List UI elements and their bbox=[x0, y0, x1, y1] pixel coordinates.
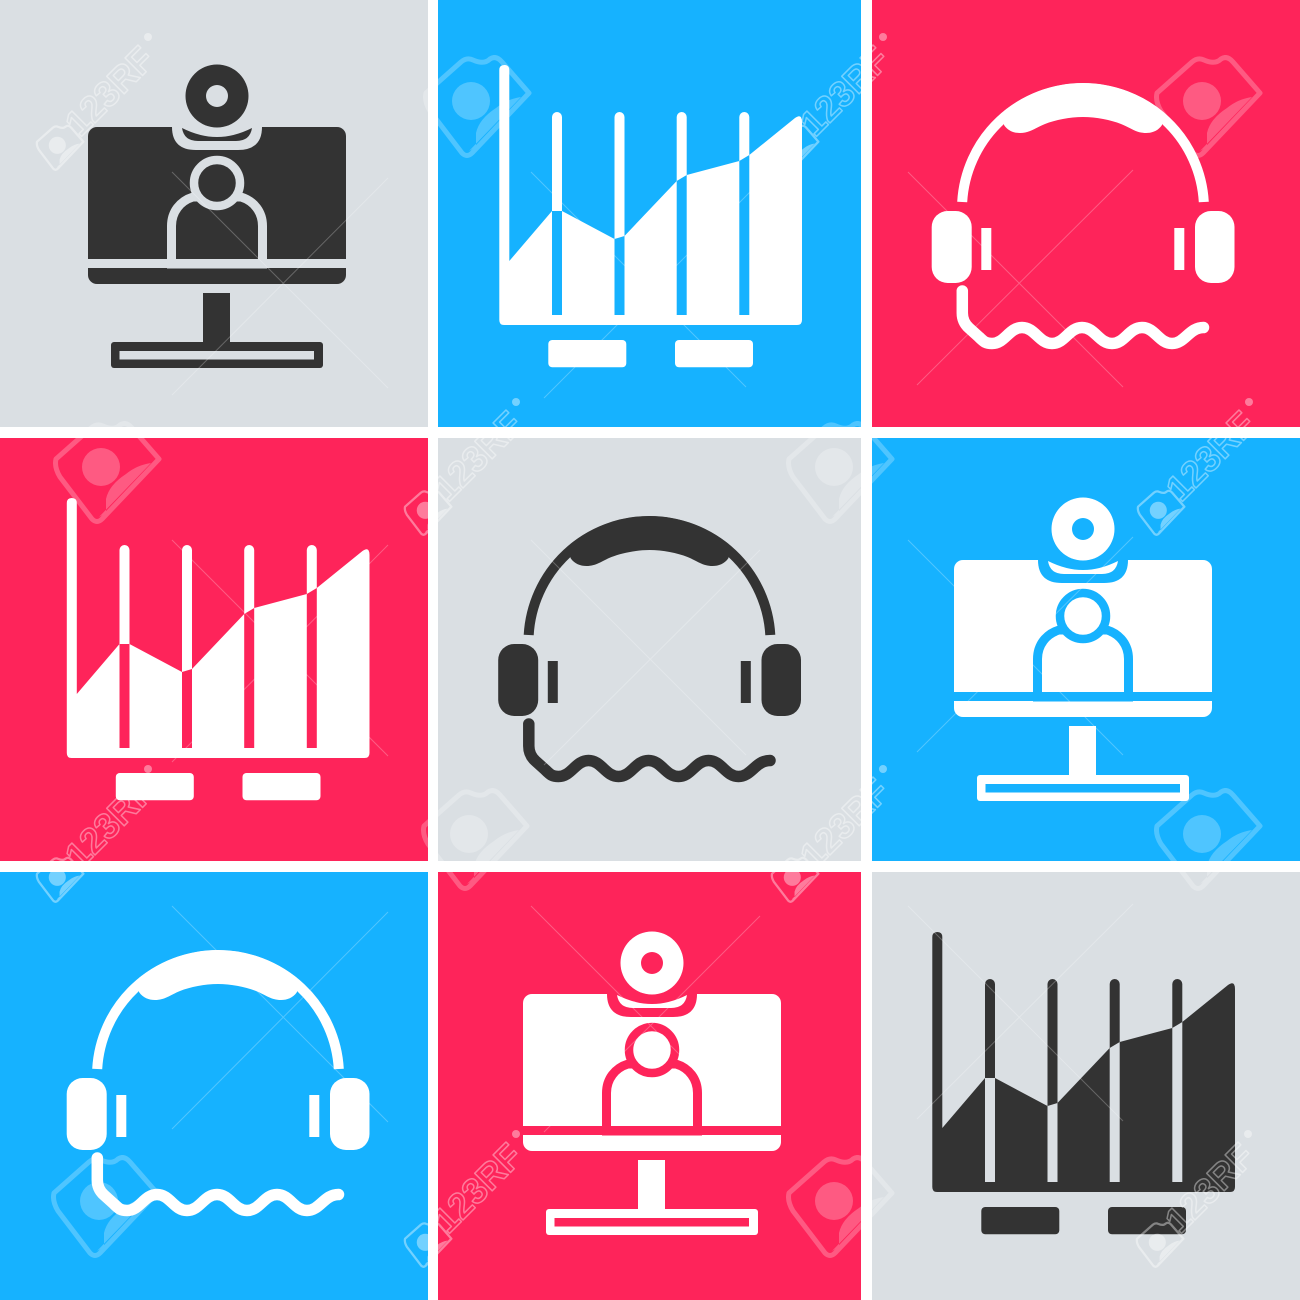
icon: headset with cable bbox=[498, 516, 801, 776]
icon: area and bar chart bbox=[67, 498, 370, 800]
icon: area and bar chart bbox=[499, 65, 802, 367]
icon: headset with cable bbox=[67, 950, 370, 1210]
icon: headset with cable bbox=[932, 83, 1234, 344]
icon: video call monitor bbox=[521, 932, 783, 1235]
panel: chart, grey bbox=[872, 872, 1300, 1300]
icon: area and bar chart bbox=[932, 932, 1235, 1234]
panel: headset, grey bbox=[438, 438, 861, 861]
panel: headset, red bbox=[872, 0, 1300, 427]
icon: video call monitor bbox=[952, 498, 1214, 801]
watermark: diagonal crosses bbox=[172, 170, 1133, 1132]
panel: monitor with webcam, grey bbox=[0, 0, 428, 427]
panel: monitor with webcam, blue bbox=[872, 438, 1300, 861]
panel: chart, red bbox=[0, 438, 428, 861]
icon: video call monitor bbox=[86, 64, 348, 368]
panel: chart, blue bbox=[438, 0, 861, 427]
panel: headset, blue bbox=[0, 872, 428, 1300]
panel: monitor with webcam, red bbox=[438, 872, 861, 1300]
